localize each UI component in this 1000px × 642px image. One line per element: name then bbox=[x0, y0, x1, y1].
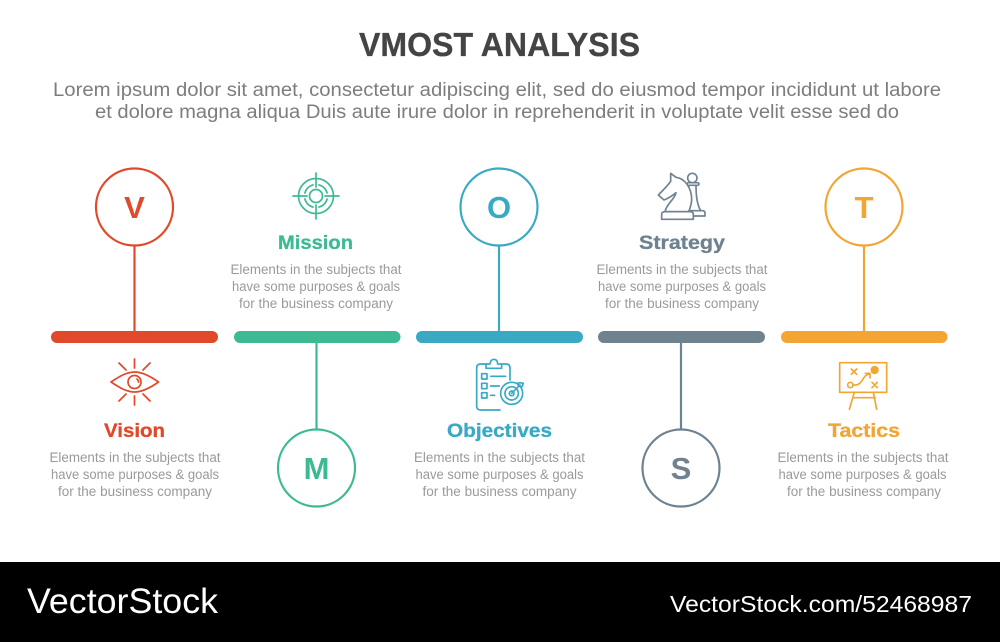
description: Tactics bbox=[778, 450, 949, 499]
description: Mission: have some purposes & goals bbox=[232, 279, 400, 294]
column: Mission bbox=[230, 173, 402, 506]
timeline bar: Objectives bbox=[416, 331, 583, 343]
description: Strategy: Elements in the subjects that bbox=[596, 262, 768, 277]
timeline bar: Mission bbox=[234, 331, 400, 343]
column: Strategy bbox=[596, 173, 768, 506]
letter S: S bbox=[671, 451, 691, 486]
description: Objectives: Elements in the subjects that bbox=[414, 450, 585, 465]
description: Mission: for the business company bbox=[239, 296, 393, 311]
heading: Tactics: Tactics bbox=[828, 420, 900, 442]
description: Objectives bbox=[414, 450, 585, 499]
footer image id: VectorStock.com/52468987 bbox=[670, 591, 972, 617]
intro text: et dolore magna aliqua Duis aute irure dolor in reprehenderit in voluptate velit esse sed do bbox=[95, 102, 899, 123]
timeline bar: Strategy bbox=[598, 331, 765, 343]
heading: Strategy: Strategy bbox=[639, 232, 725, 254]
title: VMOST ANALYSIS bbox=[359, 26, 640, 63]
O circle with stem bbox=[460, 168, 538, 332]
timeline bar: Vision bbox=[51, 331, 218, 343]
icon: chess pieces bbox=[658, 173, 705, 219]
footer band bbox=[0, 562, 1000, 642]
letter M: M bbox=[304, 451, 329, 486]
description: Objectives: have some purposes & goals bbox=[416, 467, 584, 482]
description: Vision: have some purposes & goals bbox=[51, 467, 219, 482]
M circle with stem bbox=[278, 342, 355, 506]
letter T: T bbox=[855, 190, 874, 225]
description: Mission bbox=[230, 262, 402, 311]
timeline bar: Tactics bbox=[781, 331, 948, 343]
icon: eye bbox=[111, 359, 158, 405]
V circle with stem bbox=[96, 168, 173, 332]
footer logo: VectorStock bbox=[27, 582, 219, 621]
icon: clipboard with target bbox=[477, 359, 523, 410]
description: Vision bbox=[50, 450, 221, 499]
description: Objectives: for the business company bbox=[422, 484, 577, 499]
heading: Mission: Mission bbox=[278, 232, 353, 254]
description: Vision: Elements in the subjects that bbox=[50, 450, 221, 465]
description: Tactics: Elements in the subjects that bbox=[778, 450, 949, 465]
column: Vision bbox=[50, 168, 221, 499]
description: Tactics: have some purposes & goals bbox=[778, 467, 947, 482]
letter O: O bbox=[487, 190, 511, 225]
description: Strategy: for the business company bbox=[605, 296, 759, 311]
heading: Objectives: Objectives bbox=[447, 420, 552, 442]
column: Objectives bbox=[414, 168, 585, 499]
icon: tactics board bbox=[840, 363, 887, 409]
intro text bbox=[53, 80, 941, 123]
description: Strategy: have some purposes & goals bbox=[598, 279, 766, 294]
S circle with stem bbox=[642, 342, 720, 506]
icon: target bbox=[293, 173, 339, 219]
column: Tactics bbox=[778, 168, 949, 499]
heading: Vision: Vision bbox=[104, 420, 165, 442]
intro text: Lorem ipsum dolor sit amet, consectetur adipiscing elit, sed do eiusmod tempor incididunt ut labore bbox=[53, 80, 941, 101]
letter V: V bbox=[124, 190, 145, 225]
description: Mission: Elements in the subjects that bbox=[230, 262, 402, 277]
description: Tactics: for the business company bbox=[787, 484, 941, 499]
description: Vision: for the business company bbox=[58, 484, 212, 499]
description: Strategy bbox=[596, 262, 768, 311]
T circle with stem bbox=[826, 168, 902, 332]
